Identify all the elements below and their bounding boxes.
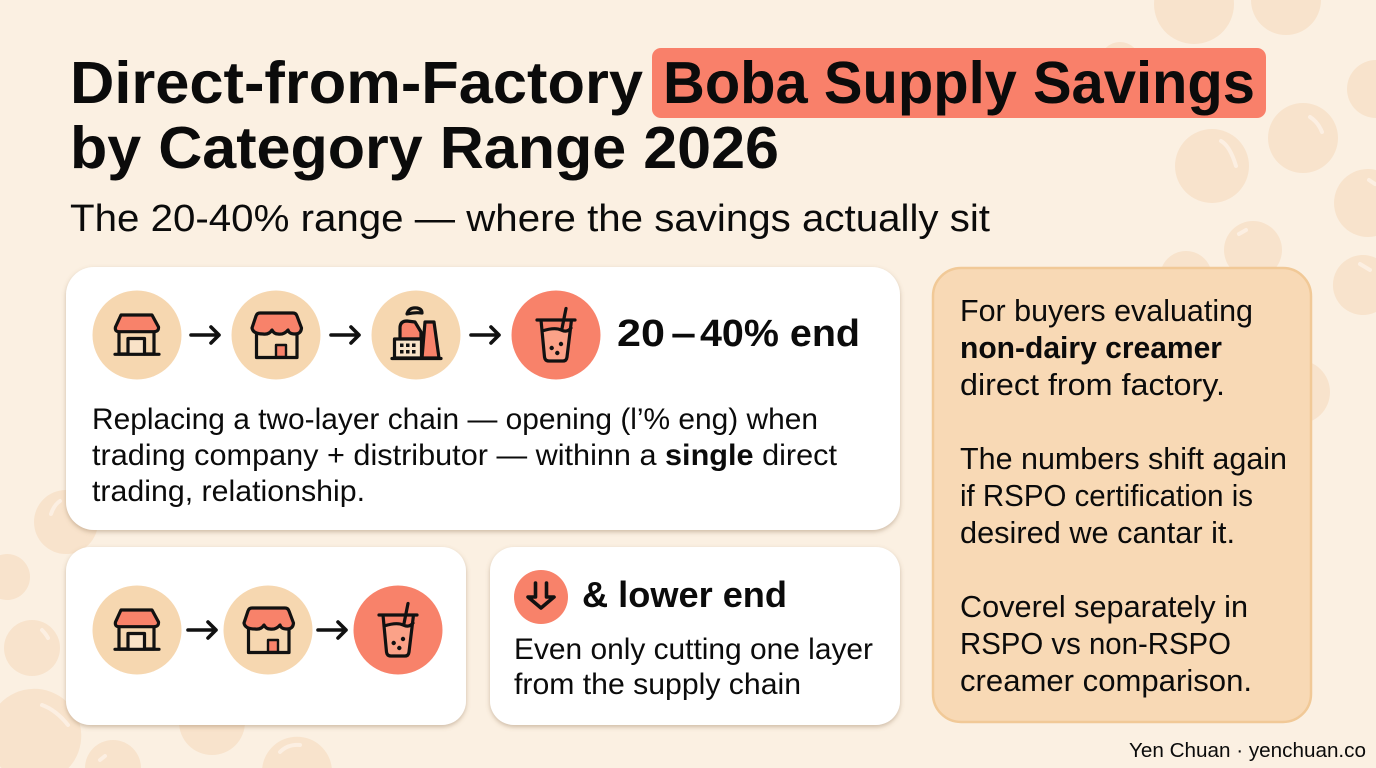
note: RSPO: desired we cantar it. [960, 515, 1235, 550]
heading: 20-40% end: 40% end [700, 313, 860, 355]
title: Direct-from-Factory [70, 50, 643, 116]
title: Boba Supply Savings [663, 50, 1255, 116]
arrow [318, 622, 346, 638]
heading: 20-40% end: – [671, 313, 696, 355]
icon: down arrows [514, 570, 568, 624]
icon: distributor shop [224, 586, 312, 674]
panel: lower end [490, 547, 900, 725]
note: buyers: direct from factory. [960, 367, 1225, 402]
icon: distributor shop [232, 290, 320, 380]
description text: trading, relationship. [92, 475, 365, 508]
title [70, 48, 1266, 181]
panel: buyer note [933, 268, 1311, 722]
note: comparison [960, 589, 1252, 698]
note: buyers: For buyers evaluating [960, 293, 1253, 328]
arrow [191, 327, 219, 343]
note: buyers: non-dairy creamer [960, 330, 1222, 365]
description text: from the supply chain [514, 668, 801, 701]
arrow [331, 327, 359, 343]
icon: factory [372, 290, 460, 380]
footer credit: Yen Chuan · yenchuan.co [1129, 740, 1366, 762]
panel: one-layer chain [66, 547, 466, 725]
icon: boba cup [512, 290, 600, 380]
description text [514, 633, 873, 701]
description text: Even only cutting one layer [514, 633, 873, 666]
arrow [471, 327, 499, 343]
note: buyers [960, 293, 1253, 402]
arrow [188, 622, 216, 638]
description text: trading company + distributor — withinn a single direct [92, 439, 838, 472]
note: RSPO: if RSPO certification is [960, 478, 1253, 513]
icon: retail store [92, 290, 182, 380]
heading: 20-40% end: 20 [617, 313, 665, 355]
heading: lower end: & lower end [582, 574, 787, 615]
description text [92, 403, 838, 508]
heading: 20-40% end [617, 313, 860, 355]
title: by Category Range 2026 [70, 115, 779, 181]
subtitle: The 20-40% range — where the savings actually sit [70, 198, 990, 240]
note: RSPO [960, 441, 1287, 550]
note: RSPO: The numbers shift again [960, 441, 1287, 476]
note: comparison: RSPO vs non-RSPO [960, 626, 1231, 661]
icon: boba cup [354, 586, 442, 674]
note: comparison: Coverel separately in [960, 589, 1248, 624]
panel: 20-40% end [66, 267, 900, 530]
title highlight [652, 48, 1266, 118]
description text: Replacing a two-layer chain — opening (l’% eng) when [92, 403, 818, 436]
note: comparison: creamer comparison. [960, 663, 1252, 698]
icon: retail store [92, 586, 182, 674]
